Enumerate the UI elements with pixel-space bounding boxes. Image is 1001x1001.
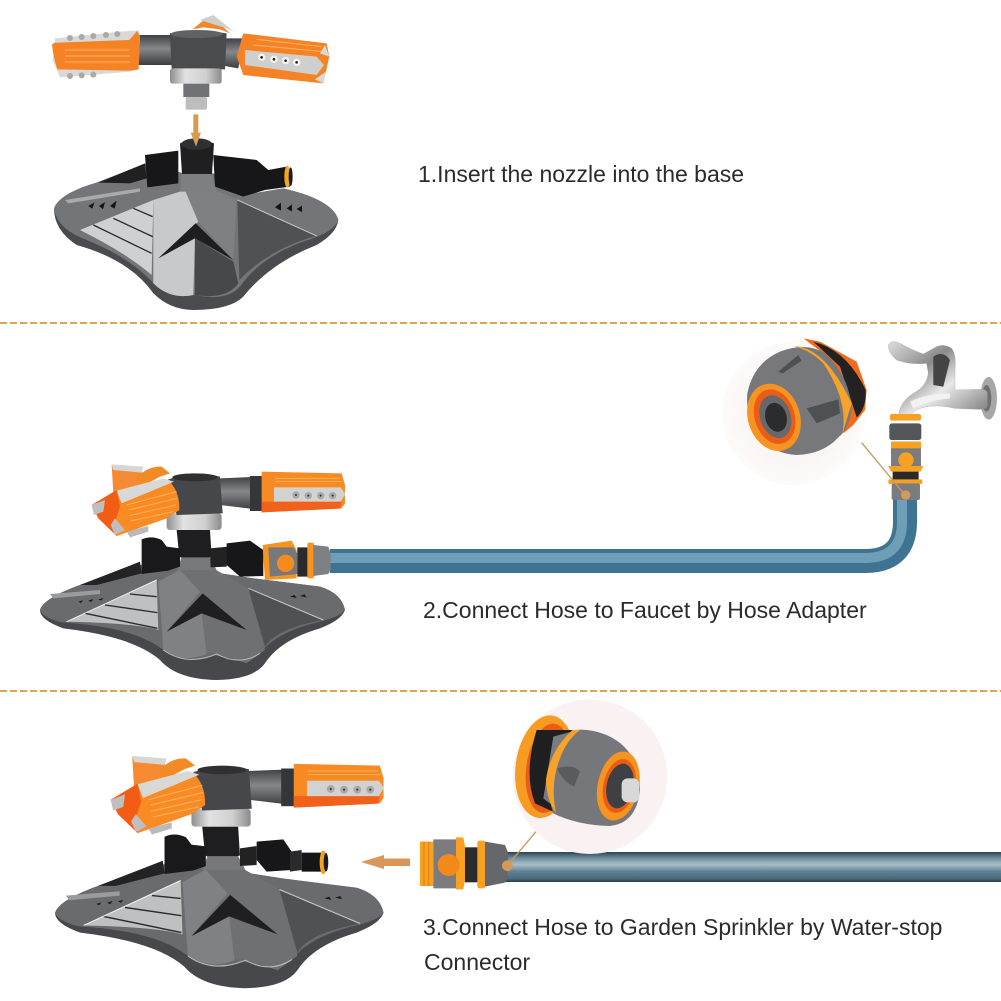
text: Connector xyxy=(424,949,530,975)
callout leader line xyxy=(862,443,905,495)
step 2 sprinkler with hose adapter xyxy=(40,464,345,680)
step 3 callout: connector close-up xyxy=(502,699,667,871)
step 3 water-stop connector xyxy=(420,837,508,889)
step 2 text: 2.Connect Hose to Faucet by Hose Adapter xyxy=(423,597,867,623)
step 3 text: 3.Connect Hose to Garden Sprinkler by Water-stop xyxy=(423,914,942,940)
step 1 illustration: sprinkler nozzle above base xyxy=(52,15,338,310)
orange arrow pointing down xyxy=(191,114,201,147)
step 3 hose xyxy=(505,852,1001,882)
arrow: connector into sprinkler xyxy=(361,855,410,869)
step 1 text: 1.Insert the nozzle into the base xyxy=(418,161,744,187)
step 3 sprinkler fitting xyxy=(240,839,328,874)
callout marker dot xyxy=(502,860,513,871)
callout marker dot xyxy=(901,490,910,500)
callout leader line xyxy=(507,832,536,866)
step 3 sprinkler xyxy=(55,756,384,988)
step 2: garden hose to faucet xyxy=(330,495,905,561)
step 2 callout: hose adapter close-up xyxy=(722,338,867,485)
divider 1 xyxy=(0,322,1001,324)
step 2 faucet with connector xyxy=(862,342,997,500)
divider 2 xyxy=(0,690,1001,692)
